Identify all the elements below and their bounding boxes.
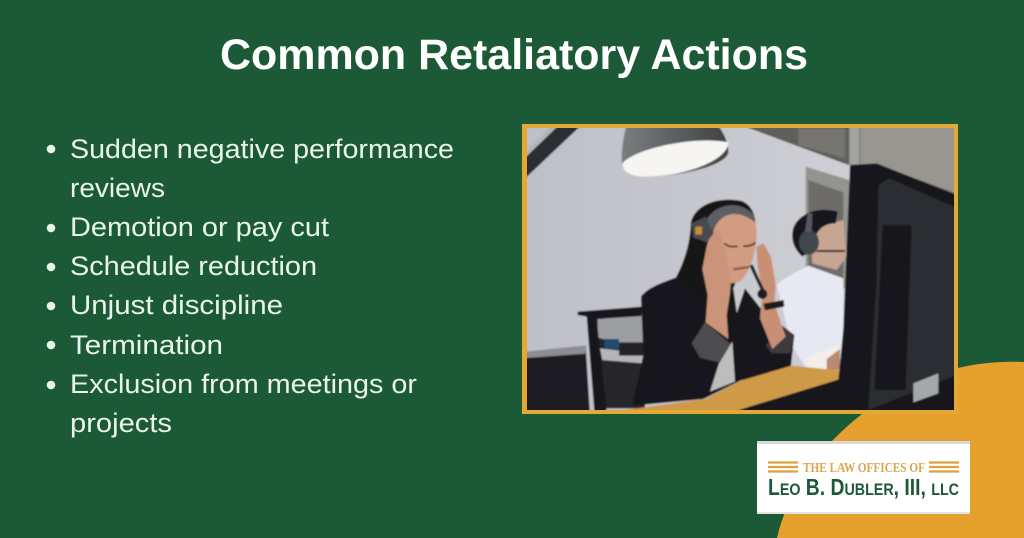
- man: face: [810, 220, 847, 270]
- bullet: sudden negative performance reviews: reviews: [70, 173, 165, 203]
- man: shirt: [777, 266, 843, 372]
- woman: right hand and arm: [756, 243, 786, 349]
- logo stripes right: [929, 462, 959, 472]
- logo stripes left: [768, 462, 798, 472]
- woman: face: [713, 213, 757, 283]
- monitor: [838, 162, 954, 410]
- bullet: unjust discipline: Unjust discipline: [70, 290, 283, 320]
- bullet: schedule reduction: Schedule reduction: [70, 251, 317, 281]
- woman: hair: [676, 198, 756, 339]
- corner shape: orange circle: [777, 362, 1024, 538]
- bullet: termination: Termination: [70, 330, 223, 360]
- logo tagline: THE LAW OFFICES OF: [803, 460, 925, 475]
- bullet: sudden negative performance reviews: Sudden negative performance: [70, 134, 454, 164]
- bullet: exclusion from meetings or projects: [47, 369, 417, 438]
- woman: jacket: [632, 277, 794, 406]
- bullet: exclusion from meetings or projects: projects: [70, 408, 172, 438]
- bullet: demotion or pay cut: Demotion or pay cut: [70, 212, 330, 242]
- back chair: [597, 318, 645, 408]
- doorway: [806, 167, 849, 288]
- man: headset: [799, 230, 819, 255]
- bullet: sudden negative performance reviews: [47, 134, 454, 203]
- logo firm name: LEO B. DUBLER, III, LLC: [768, 474, 959, 500]
- desk: [625, 366, 843, 415]
- woman: headset: [704, 205, 755, 230]
- woman: left hand and arm: [702, 230, 731, 339]
- photo: stressed call-centre worker: [527, 128, 954, 410]
- upper background: [746, 128, 954, 196]
- bullet: exclusion from meetings or projects: Exclusion from meetings or: [70, 369, 417, 399]
- bullet list: [47, 134, 454, 438]
- man: hair: [792, 210, 838, 257]
- logo card: [757, 441, 970, 514]
- lamp: [621, 128, 730, 176]
- photo frame: [522, 124, 958, 414]
- keyboard: [733, 379, 840, 412]
- window rail: [527, 128, 580, 178]
- title: Common Retaliatory Actions: [220, 31, 808, 79]
